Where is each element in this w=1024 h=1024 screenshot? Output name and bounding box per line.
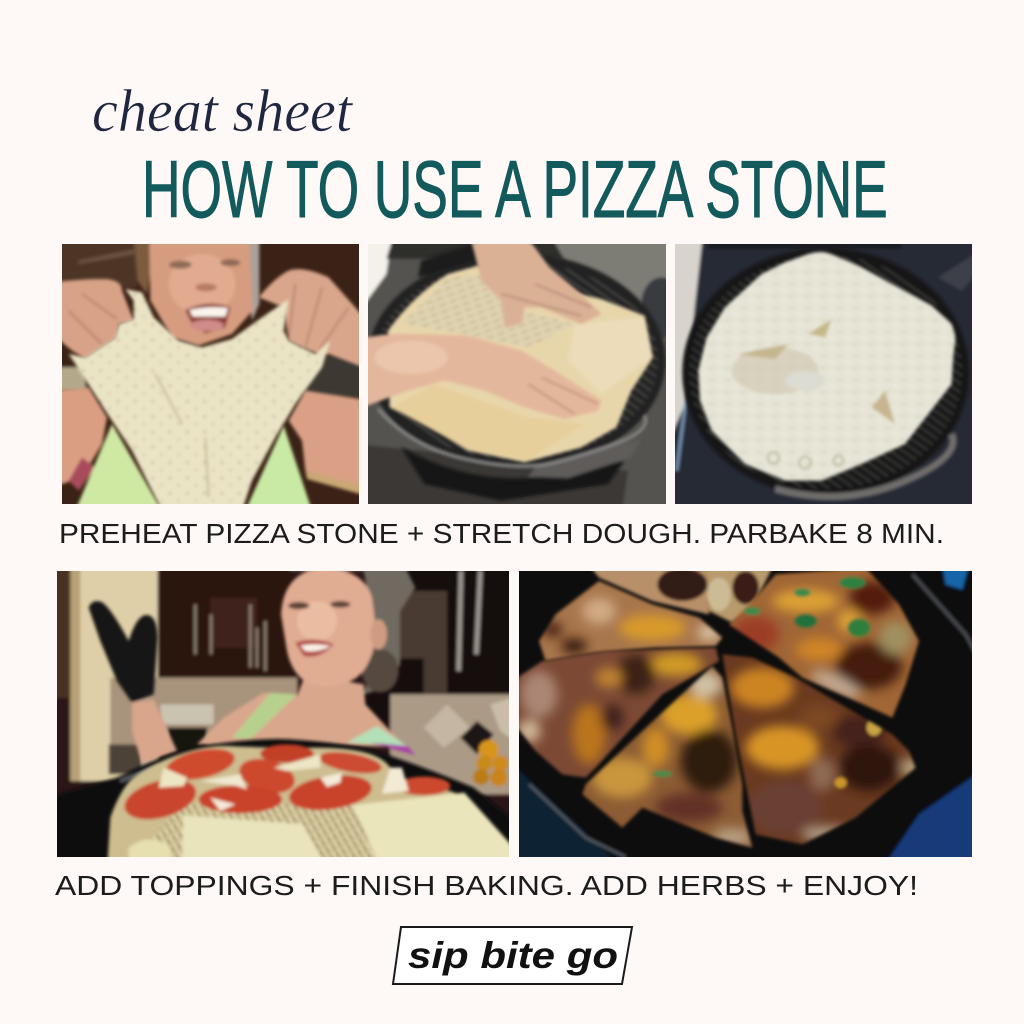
title: HOW TO USE A PIZZA STONE	[142, 144, 888, 235]
counter background	[675, 244, 972, 504]
black pizza pan	[57, 736, 509, 857]
parbaked dough	[698, 252, 955, 481]
slice: left	[519, 646, 721, 780]
dark background and blue towels	[519, 571, 972, 857]
photo: baked pizza on stone	[519, 571, 972, 857]
logo box	[393, 927, 632, 984]
photo: pressing dough on stone	[368, 244, 666, 504]
caption: first row: PREHEAT PIZZA STONE + STRETCH DOUGH. PARBAKE 8 MIN.	[59, 518, 944, 549]
slice: upper right with herbs	[726, 564, 926, 721]
slice: top crust	[590, 571, 774, 624]
hands gripping dough	[52, 269, 372, 371]
kitchen background	[62, 244, 359, 504]
kitchen background	[57, 571, 509, 820]
stone pan	[682, 248, 969, 497]
photo: parbaked crust on stone	[675, 244, 972, 504]
slice: lower right	[719, 651, 922, 851]
dough	[388, 266, 653, 462]
slice: upper left	[537, 579, 724, 662]
arms and green top	[62, 386, 359, 504]
caption: second row: ADD TOPPINGS + FINISH BAKING. ADD HERBS + ENJOY!	[55, 870, 918, 901]
upper hand	[470, 244, 601, 328]
script heading: cheat sheet: cheat sheet	[92, 78, 353, 144]
oven mitt and arm	[89, 601, 177, 764]
logo: sip bite go	[393, 927, 632, 984]
stretched dough	[69, 289, 330, 511]
pizza with pepperoni and cheese	[105, 742, 509, 857]
woman	[197, 564, 415, 755]
lower arm and hand	[358, 334, 601, 419]
slice: lower middle	[576, 661, 759, 851]
counter background	[368, 244, 666, 504]
woman's face	[134, 237, 259, 346]
photo: stretching dough in front of face	[62, 244, 359, 504]
stone pan	[367, 244, 665, 501]
photo: woman holding topped pizza	[57, 571, 509, 857]
logo wordmark: sip bite go	[408, 935, 618, 976]
